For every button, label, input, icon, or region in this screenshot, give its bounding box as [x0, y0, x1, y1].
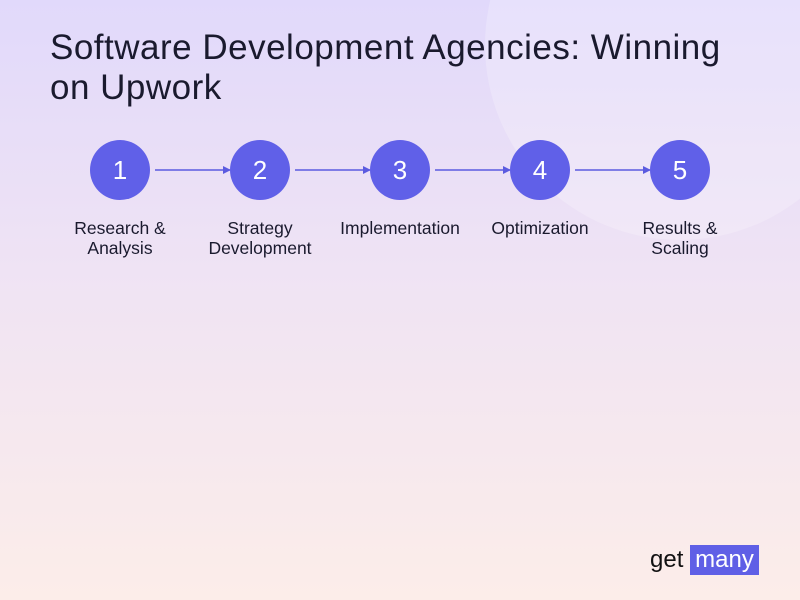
label 5: Scaling [651, 238, 709, 258]
label 2: Strategy [227, 218, 293, 238]
step 2 [230, 140, 290, 200]
logo: many [695, 546, 754, 573]
step 4: 4 [533, 155, 547, 185]
step 2: 2 [253, 155, 267, 185]
step 5 [650, 140, 710, 200]
label 5 [643, 218, 718, 258]
step 5: 5 [673, 155, 687, 185]
step 1 [90, 140, 150, 200]
label 3: Implementation [340, 218, 460, 238]
label 5: Results & [643, 218, 717, 238]
arrows [155, 166, 650, 174]
title: Software Development Agencies: Winning [50, 28, 721, 67]
logo [650, 545, 759, 575]
label 1 [74, 218, 166, 258]
process flow [74, 140, 718, 258]
step 3: 3 [393, 155, 407, 185]
logo: get [650, 546, 683, 573]
label 1: Research & [74, 218, 166, 238]
step 3 [370, 140, 430, 200]
label 4: Optimization [491, 218, 589, 238]
step 4 [510, 140, 570, 200]
title [50, 28, 721, 107]
label 2: Development [208, 238, 312, 258]
label 1: Analysis [87, 238, 153, 258]
label 2 [208, 218, 312, 258]
title: on Upwork [50, 68, 222, 107]
step 1: 1 [113, 155, 127, 185]
